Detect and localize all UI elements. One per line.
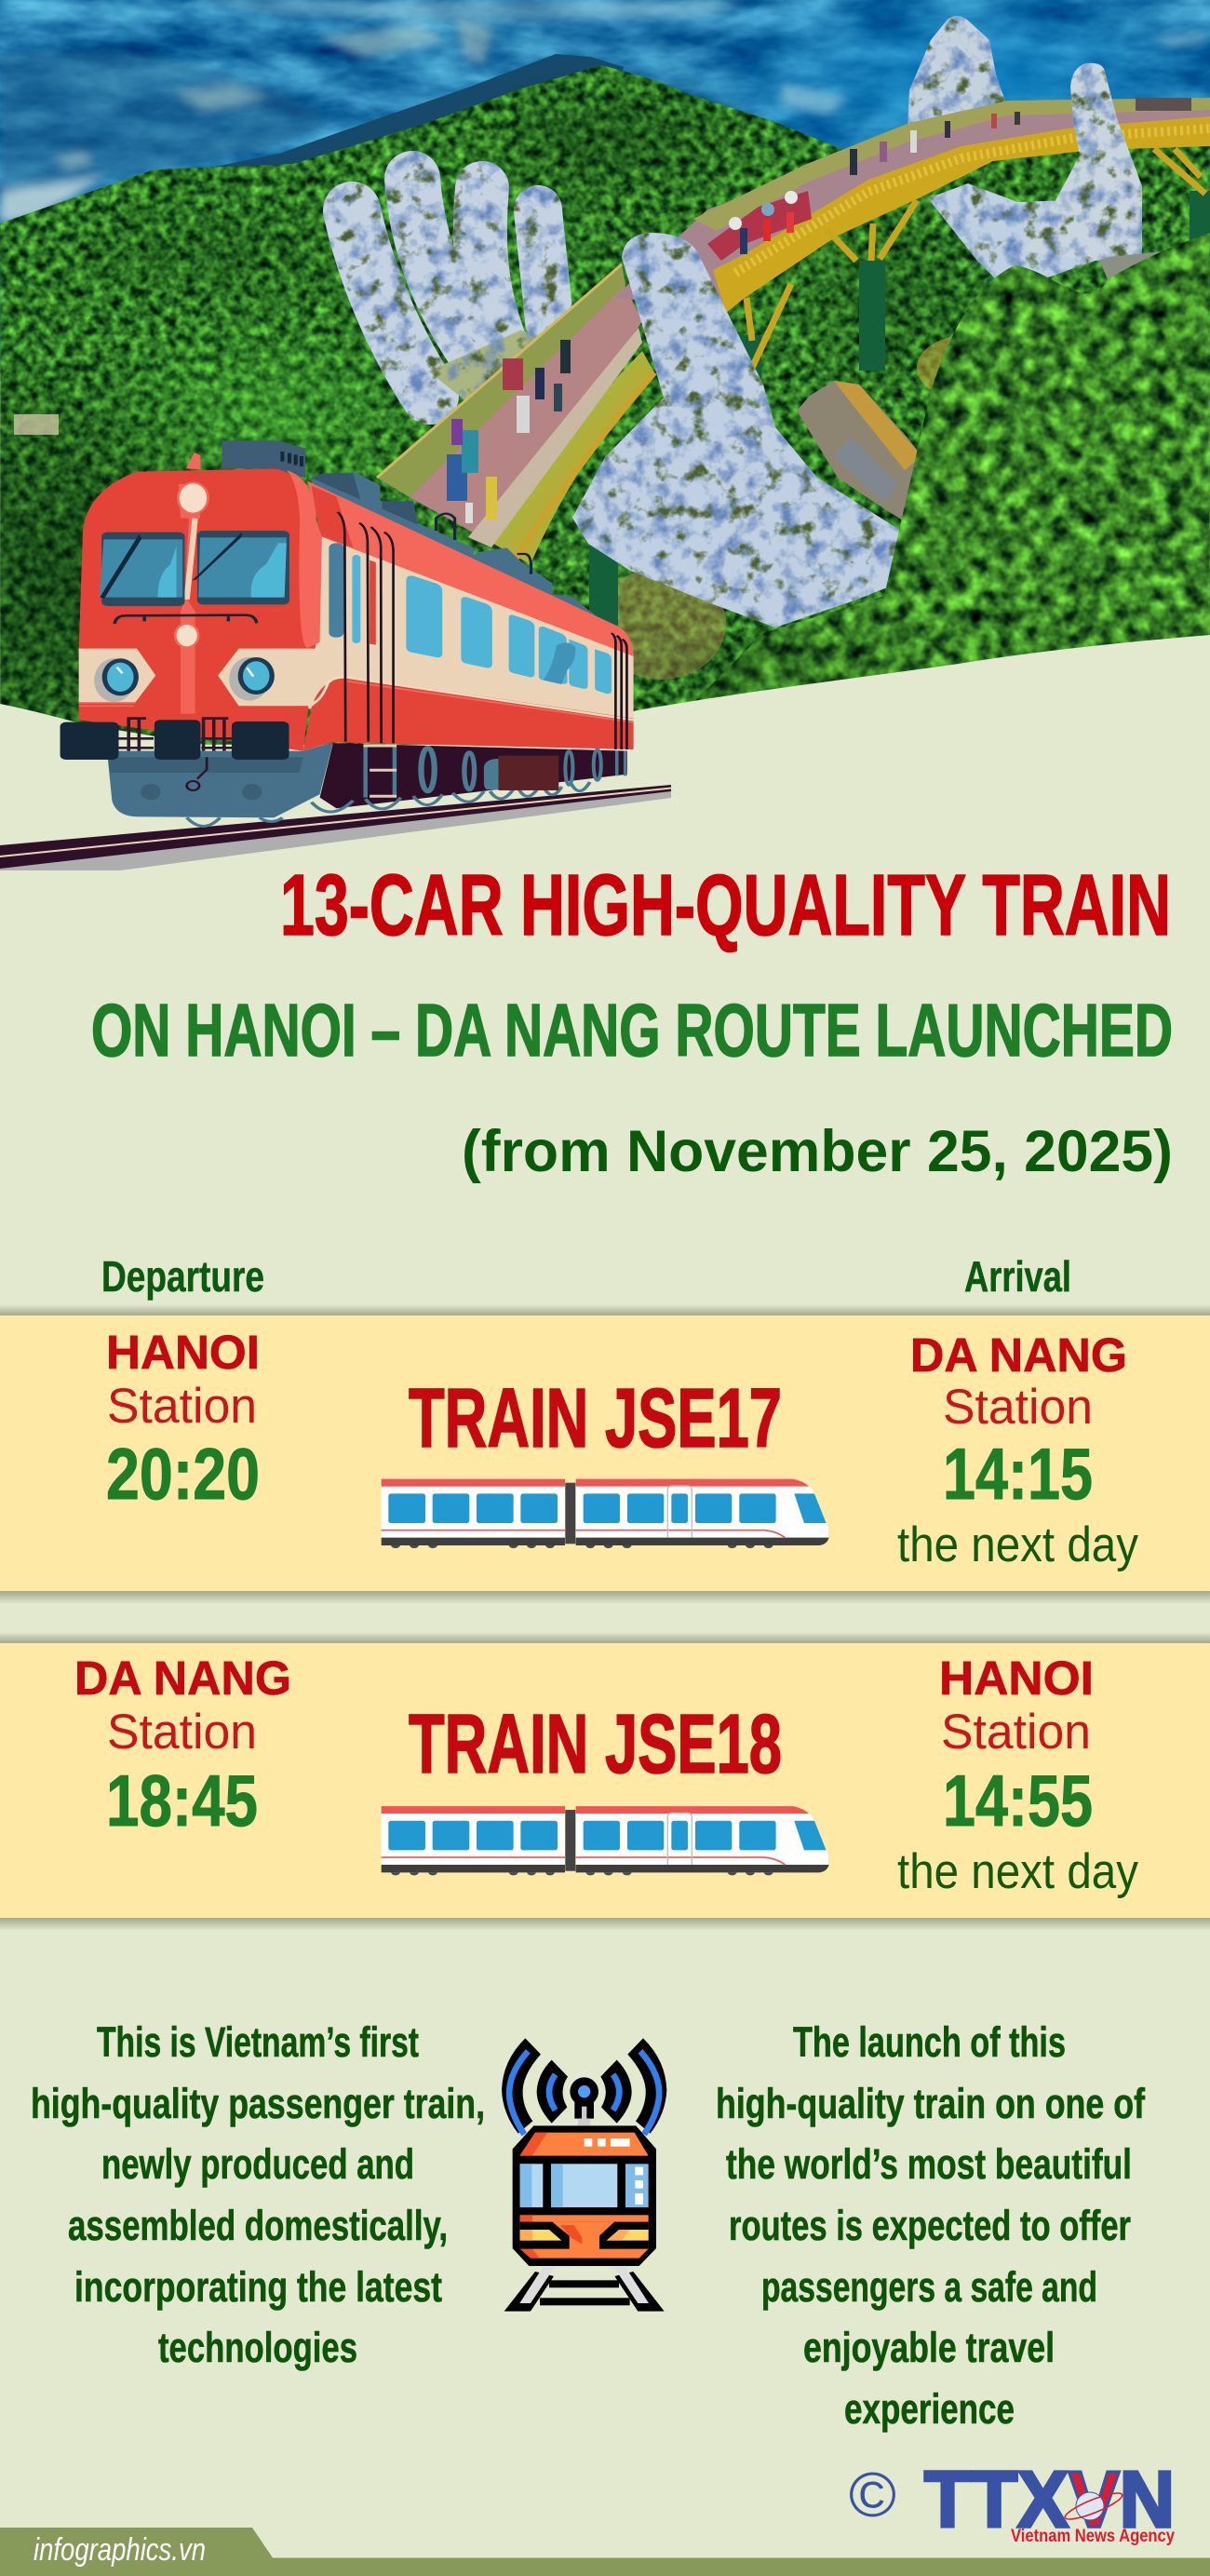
- red diesel train: [60, 440, 634, 826]
- near-side big finger and palm: [572, 233, 921, 627]
- struts: [724, 149, 1205, 368]
- text block: first high-quality train: [31, 2018, 485, 2371]
- departure: Da Nang: 18:45: [106, 1760, 258, 1841]
- front light edge: [287, 470, 322, 648]
- far-side rocks: [1098, 251, 1206, 307]
- arrival: Hanoi: Station: [941, 1705, 1091, 1760]
- near-side thumb: [1024, 63, 1142, 261]
- front cream panels: [79, 649, 155, 703]
- ladder: [366, 747, 395, 798]
- top light: [178, 482, 208, 514]
- text block: first high-quality train: technologies: [158, 2324, 357, 2371]
- hero photo: Golden Bridge held by giant hands: [0, 0, 1210, 819]
- train body: [513, 2125, 656, 2266]
- wheels: [187, 748, 601, 826]
- cream carriage side: [303, 537, 634, 722]
- text block: first high-quality train: newly produced and: [101, 2140, 414, 2188]
- bumpers: [60, 720, 289, 760]
- icon: connected train with signal waves: [502, 2038, 666, 2312]
- arrival: Hanoi: 14:55: [943, 1760, 1093, 1841]
- arrival: Da Nang: DA NANG: [910, 1328, 1127, 1382]
- arrival: Da Nang: [897, 1328, 1138, 1572]
- roof units: [222, 440, 619, 627]
- green mountain and forest: [0, 65, 1210, 819]
- carriage stripes: [241, 678, 634, 720]
- footer source label: infographics.vn: [34, 2532, 206, 2568]
- logo: TTXVN Vietnam News Agency: Vietnam News Agency: [1011, 2527, 1175, 2546]
- text block: first high-quality train: assembled domestically,: [68, 2202, 448, 2249]
- upper railing: [693, 98, 1210, 231]
- arrival: Da Nang: 14:15: [943, 1433, 1093, 1515]
- left railing: [377, 264, 625, 497]
- crowd on bridge: [447, 98, 1191, 523]
- pale curved ground: [0, 635, 1210, 931]
- foreground trees: [605, 233, 1210, 745]
- panel: train JSE18: [0, 1632, 1210, 1931]
- locomotive front: [79, 468, 316, 751]
- dark ridge: [0, 54, 624, 279]
- undercarriage: [320, 743, 627, 808]
- red lower carriage: [303, 677, 634, 751]
- icon: white high-speed train: [382, 1806, 829, 1875]
- departure: Hanoi: HANOI: [106, 1326, 260, 1379]
- brown equipment box: [484, 759, 499, 789]
- column heading: Arrival: Arrival: [964, 1252, 1071, 1301]
- logo: TTXVN Vietnam News Agency: TTXVN: [924, 2456, 1175, 2544]
- train name: TRAIN JSE18: [409, 1698, 782, 1791]
- rails: [504, 2267, 665, 2312]
- handrails: [338, 512, 626, 749]
- footer band: [0, 2528, 1210, 2576]
- text block: first high-quality train: high-quality passenger train,: [31, 2080, 485, 2127]
- eyebrow grille: [114, 615, 257, 624]
- copyright symbol: ©: [849, 2460, 896, 2530]
- front coupler details: [118, 719, 233, 751]
- lower deck: [410, 279, 642, 544]
- icon: white high-speed train: [382, 1479, 829, 1548]
- train name: TRAIN JSE17: [409, 1372, 782, 1465]
- panel: train JSE17: [0, 1304, 1210, 1604]
- front windows: [100, 531, 289, 606]
- text block: launch of the train: passengers a safe and: [761, 2263, 1097, 2311]
- departure: Da Nang: DA NANG: [74, 1652, 291, 1705]
- departure: Da Nang: [74, 1652, 291, 1841]
- departure: Hanoi: [106, 1326, 260, 1515]
- upper gold span: [713, 116, 1210, 313]
- arrival: Hanoi: [897, 1652, 1138, 1899]
- hook: [197, 757, 207, 779]
- rear hand: [352, 179, 554, 410]
- door window: [329, 543, 343, 638]
- arrival: Hanoi: the next day: [897, 1844, 1138, 1899]
- railway track: [0, 785, 671, 870]
- headlights: [94, 657, 275, 702]
- rock outcrop: [797, 381, 946, 527]
- departure: Hanoi: 20:20: [106, 1433, 260, 1515]
- centre stripes: [179, 484, 201, 714]
- text block: first high-quality train: incorporating the latest: [74, 2263, 442, 2311]
- departure: Hanoi: Station: [107, 1379, 257, 1434]
- text block: launch of the train: The launch of this: [793, 2018, 1066, 2066]
- arrival: Hanoi: HANOI: [939, 1652, 1094, 1705]
- title date: (from November 25, 2025): [462, 1119, 1173, 1184]
- text block: launch of the train: enjoyable travel: [803, 2324, 1055, 2371]
- far-side hand: fingers and palm: [908, 16, 1142, 291]
- carriage windows: [352, 555, 612, 694]
- right railing: [468, 328, 642, 547]
- arrival: Da Nang: the next day: [897, 1517, 1138, 1572]
- lower gold span: [493, 351, 655, 564]
- carriage roof band: [307, 481, 634, 658]
- column heading: Departure: Departure: [101, 1252, 264, 1301]
- departure: Da Nang: Station: [107, 1705, 257, 1760]
- text block: first high-quality train: This is Vietnam’s first: [97, 2018, 419, 2066]
- text block: launch of the train: experience: [844, 2385, 1015, 2433]
- bridge pillars: [589, 191, 1210, 626]
- upper deck: [614, 104, 1210, 307]
- lower light: [175, 624, 198, 647]
- distant blue valley: [0, 0, 1210, 372]
- arrival: Da Nang: Station: [943, 1380, 1093, 1435]
- blue skirt: [107, 742, 333, 817]
- golden bridge: [377, 98, 1210, 564]
- signal post: [186, 452, 200, 469]
- signal waves: [502, 2038, 666, 2135]
- text block: launch of the train: [716, 2018, 1146, 2433]
- title: [91, 856, 1173, 1184]
